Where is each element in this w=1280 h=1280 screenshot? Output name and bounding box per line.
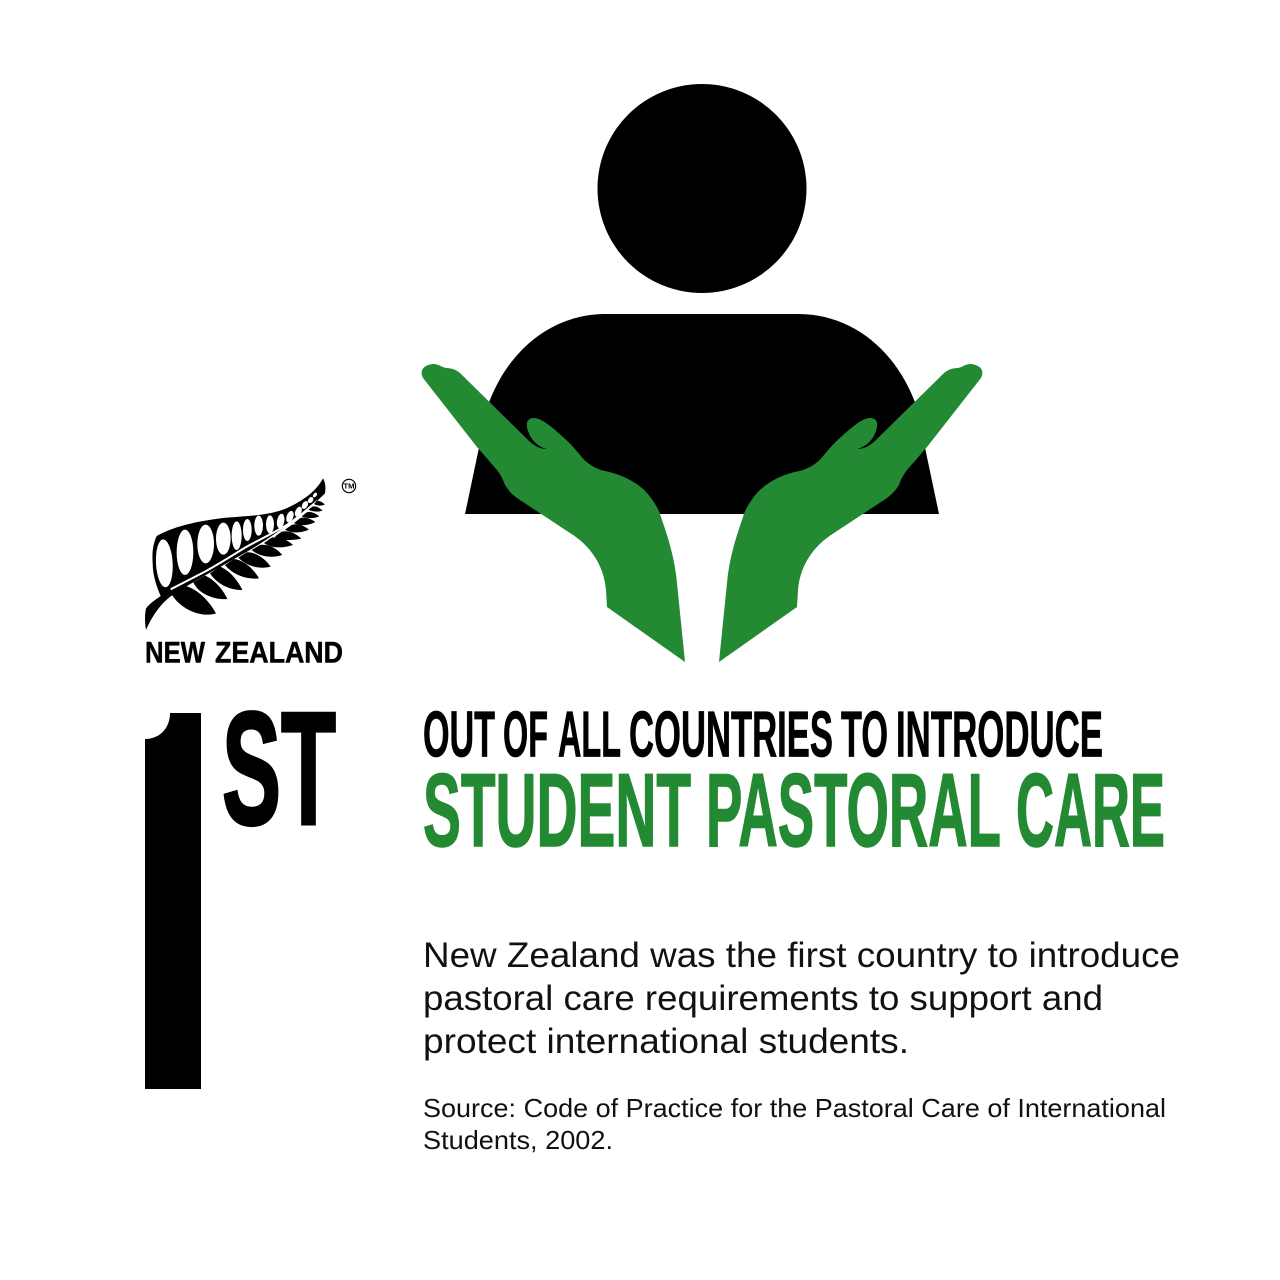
heading line 1: OF [503, 698, 548, 770]
heading [423, 698, 1165, 869]
heading line 1 [423, 698, 1103, 770]
fern [145, 478, 356, 630]
body text: pastoral care requirements to support and [423, 979, 1103, 1018]
body text [423, 936, 1180, 1061]
heading line 2: PASTORAL [706, 753, 1001, 869]
person head [598, 84, 806, 293]
logo wordmark: ZEALAND [215, 636, 343, 670]
logo: New Zealand fern mark [145, 478, 356, 670]
right hand [719, 364, 982, 662]
heading line 1: TO [841, 698, 888, 770]
icon: person with supporting hands [422, 84, 982, 662]
heading line 1: INTRODUCE [896, 698, 1103, 770]
logo wordmark [145, 636, 343, 670]
numeral 1 [145, 713, 201, 1089]
trademark symbol [342, 479, 356, 493]
numeral: 1st [145, 679, 336, 1089]
person body [465, 314, 939, 514]
heading line 1: COUNTRIES [629, 698, 833, 770]
logo wordmark: NEW [145, 636, 206, 670]
source note: Students, 2002. [423, 1125, 613, 1155]
heading line 2 [423, 753, 1165, 869]
heading line 2: STUDENT [423, 753, 691, 869]
heading line 1: ALL [558, 698, 621, 770]
ordinal suffix ST: S [222, 679, 281, 859]
body text: New Zealand was the first country to introduce [423, 936, 1180, 975]
ordinal suffix ST: T [281, 679, 336, 859]
body text: protect international students. [423, 1022, 909, 1061]
source note: Source: Code of Practice for the Pastoral Care of International [423, 1093, 1166, 1123]
left hand [422, 364, 685, 662]
heading line 1: OUT [423, 698, 495, 770]
trademark symbol: TM [343, 482, 355, 491]
source note [423, 1093, 1166, 1155]
